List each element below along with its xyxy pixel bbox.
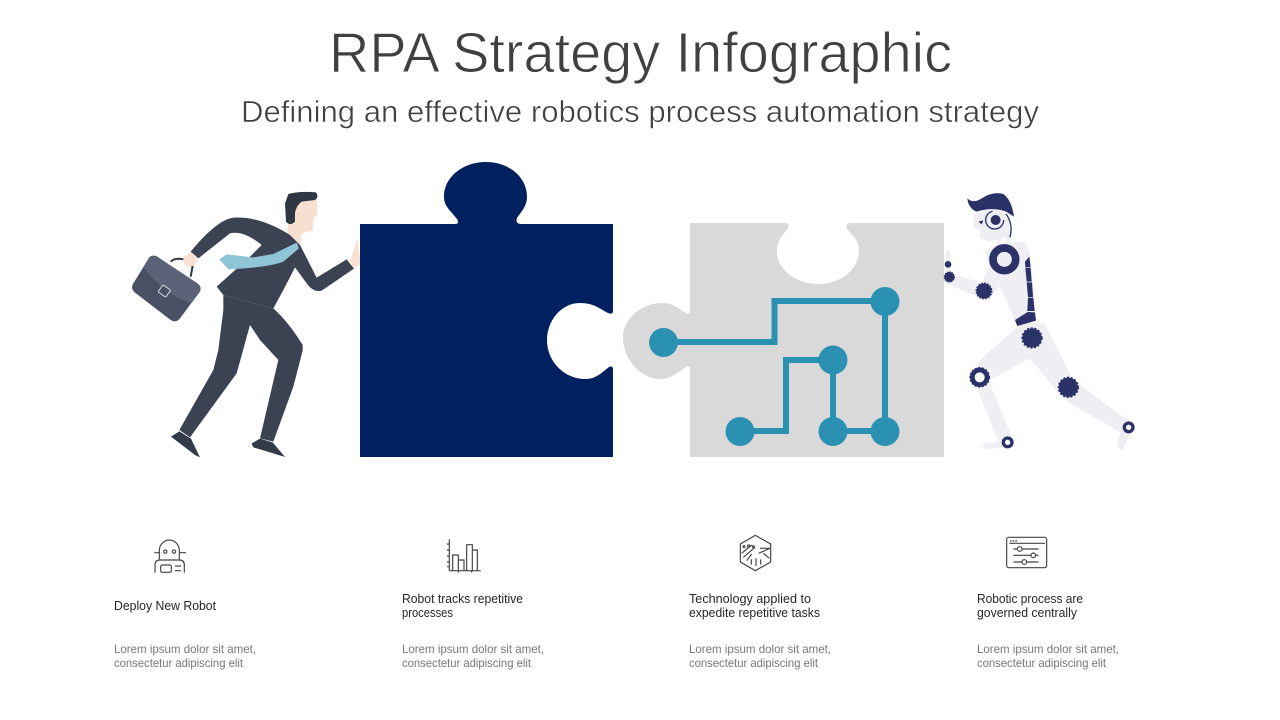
puzzle piece: navy <box>360 162 613 457</box>
man: tie <box>219 243 299 269</box>
body text: Lorem ipsum dolor sit amet, <box>114 642 256 656</box>
heading: expedite repetitive tasks <box>689 606 820 620</box>
robot: shoulder ring <box>993 248 1016 271</box>
circuit nodes <box>649 287 900 446</box>
heading: Technology applied to <box>689 592 811 606</box>
robot: head joint <box>978 211 1011 237</box>
man: hands <box>183 239 361 268</box>
body text <box>114 642 256 670</box>
title: RPA Strategy Infographic <box>329 21 952 85</box>
heading: Deploy New Robot <box>114 599 217 613</box>
column 1: deploy new robot <box>114 540 256 670</box>
body text <box>402 642 544 670</box>
robot: body <box>946 208 1131 450</box>
subtitle: Defining an effective robotics process automation strategy <box>241 94 1039 129</box>
icon: bar chart <box>447 539 481 573</box>
icon: control window <box>1007 537 1047 568</box>
column 3: technology applied <box>689 535 831 670</box>
heading: Robotic process are <box>977 592 1083 606</box>
heading <box>977 592 1083 620</box>
body text: consectetur adipiscing elit <box>402 656 532 670</box>
heading: processes <box>402 606 453 620</box>
column 4: robotic process governed centrally <box>977 537 1119 670</box>
briefcase <box>132 256 201 322</box>
illustration: businessman with briefcase <box>132 192 361 457</box>
body text: consectetur adipiscing elit <box>689 656 819 670</box>
column 2: robot tracks repetitive processes <box>402 539 544 670</box>
man: trousers <box>179 295 303 442</box>
heading <box>689 592 820 620</box>
man: head <box>287 197 317 246</box>
robot: gears <box>944 261 1133 447</box>
body text: consectetur adipiscing elit <box>114 656 244 670</box>
man: shoes <box>171 431 285 457</box>
man: hair <box>285 192 317 224</box>
circuit lines <box>663 301 885 431</box>
man: jacket <box>191 218 354 308</box>
body text: Lorem ipsum dolor sit amet, <box>402 642 544 656</box>
icon: circuit hexagon <box>740 535 771 571</box>
heading: Robot tracks repetitive <box>402 592 523 606</box>
grey piece shape <box>623 223 944 457</box>
body text: Lorem ipsum dolor sit amet, <box>689 642 831 656</box>
heading: governed centrally <box>977 606 1078 620</box>
body text <box>689 642 831 670</box>
robot: hair <box>967 193 1014 217</box>
puzzle piece: grey with circuit <box>623 223 944 457</box>
body text <box>977 642 1119 670</box>
robot: side panel <box>1015 257 1036 326</box>
body text: consectetur adipiscing elit <box>977 656 1107 670</box>
heading <box>402 592 523 620</box>
body text: Lorem ipsum dolor sit amet, <box>977 642 1119 656</box>
icon: robot <box>154 540 186 573</box>
illustration: robot <box>944 193 1133 450</box>
